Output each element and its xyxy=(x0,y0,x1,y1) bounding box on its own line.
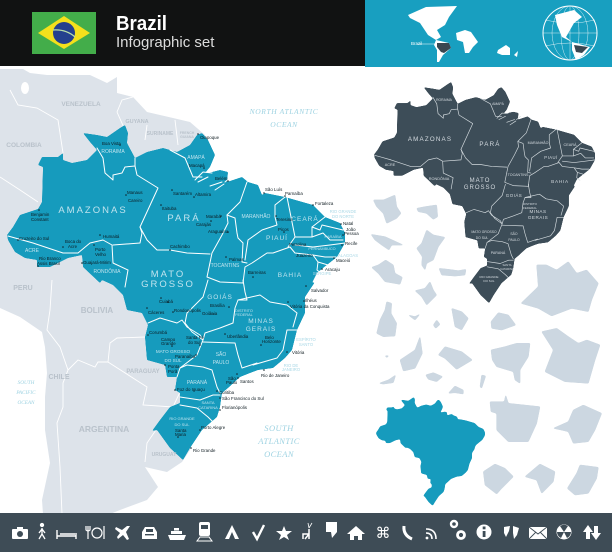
city labels: São xyxy=(228,376,236,381)
dark map state labels: GROSSO xyxy=(464,185,496,191)
city labels: Carajás xyxy=(196,222,212,227)
dark map state labels: MINAS xyxy=(529,209,547,214)
state labels: SÃO xyxy=(216,351,226,358)
city labels xyxy=(19,135,359,453)
dark map state labels: TOCANTINS xyxy=(508,173,529,177)
state labels: DO SUL xyxy=(175,422,190,427)
icon: check xyxy=(253,525,264,539)
city labels: Belém xyxy=(215,176,228,181)
city labels: Belo xyxy=(265,335,274,340)
city labels: Juazeiro xyxy=(296,253,313,258)
dark map state labels: BAHIA xyxy=(551,179,569,184)
dark map state labels: DO SUL xyxy=(476,236,488,240)
country labels: ARGENTINA xyxy=(79,424,129,434)
city labels: Grande xyxy=(161,341,176,346)
dark map state labels: MATO GROSSO xyxy=(471,230,497,234)
icon: deer xyxy=(303,523,312,539)
header globe panel xyxy=(365,0,612,67)
coastal state labels: SANTO xyxy=(299,342,314,347)
individual state silhouettes xyxy=(371,195,600,388)
ocean labels: PACIFIC xyxy=(15,390,36,396)
city labels: Vitória xyxy=(292,350,305,355)
country labels: GUIANA xyxy=(180,135,194,139)
city labels: Teresina xyxy=(276,217,293,222)
state labels: PARÁ xyxy=(167,213,201,224)
icon: tent xyxy=(225,525,239,539)
city labels: Paulo xyxy=(226,380,238,385)
city labels: Picos xyxy=(278,227,290,232)
globe locator xyxy=(543,6,597,60)
city labels: Boa Vista xyxy=(102,141,121,146)
icon: knife fork plate xyxy=(86,526,104,539)
city labels: Cuiabá xyxy=(159,299,173,304)
icon: walker xyxy=(39,524,45,539)
world locator map xyxy=(408,6,518,62)
coastal state labels: ESPÍRITO xyxy=(296,337,316,342)
dark map state labels: GERAIS xyxy=(528,215,548,220)
city labels: Rio Branco xyxy=(39,256,61,261)
dark map state labels: AMAPÁ xyxy=(492,102,505,106)
icon: car xyxy=(142,527,157,539)
state labels: PARANÁ xyxy=(187,379,208,386)
city labels: Careiro xyxy=(128,198,143,203)
state labels: TOCANTINS xyxy=(211,263,240,269)
city labels: Cáceres xyxy=(148,310,165,315)
icon: train xyxy=(197,522,212,541)
state labels: GERAIS xyxy=(246,326,276,333)
city labels: Araguaína xyxy=(208,229,229,234)
dark map state labels: PAULO xyxy=(508,238,520,242)
state labels: DISTRITO xyxy=(235,309,253,313)
main map xyxy=(0,69,359,514)
icon: ship xyxy=(168,528,186,540)
icon: bed xyxy=(57,530,76,539)
country labels: GUYANA xyxy=(125,119,149,125)
dark map state labels: FEDERAL xyxy=(523,206,537,210)
city labels: Porã xyxy=(168,369,178,374)
land: neighbouring countries xyxy=(0,69,210,514)
map of states: dark Brazil xyxy=(374,82,595,303)
state labels: PARAÍBA xyxy=(324,234,342,239)
city labels: Parnaíba xyxy=(285,191,303,196)
teal Brazil silhouette xyxy=(376,397,485,506)
state labels: GOIÁS xyxy=(207,292,233,301)
city labels: Santa xyxy=(175,428,187,433)
dark map state labels: CATARINA xyxy=(500,267,514,271)
city labels: Boca do xyxy=(65,239,82,244)
city labels: Petrolina xyxy=(289,242,307,247)
city labels: Curitiba xyxy=(219,390,235,395)
coastal state labels: ALAGOAS xyxy=(338,253,358,258)
city labels: Oiapoque xyxy=(200,135,220,140)
city labels: Horizonte xyxy=(262,339,281,344)
city labels: Ilhéus xyxy=(305,298,318,303)
dark map state labels: MARANHÃO xyxy=(528,140,549,145)
ocean labels: NORTH ATLANTIC xyxy=(249,107,319,116)
state labels: DO SUL xyxy=(164,358,182,363)
dark map state labels xyxy=(385,98,577,283)
city labels: Campo xyxy=(161,337,176,342)
city labels: Aracaju xyxy=(325,267,340,272)
dark map state labels: RONDÔNIA xyxy=(429,176,450,181)
city labels: São Luís xyxy=(265,187,283,192)
icon: info xyxy=(476,524,492,540)
city labels: Pessoa xyxy=(344,231,359,236)
state labels: GROSSO xyxy=(141,279,195,290)
city labels: Salvador xyxy=(311,288,329,293)
city labels: Rondonópolis xyxy=(174,308,202,313)
state labels: MARANHÃO xyxy=(242,213,271,220)
country labels: URUGUAY xyxy=(152,452,177,458)
city labels: Brasília xyxy=(210,303,225,308)
subtitle: Infographic set xyxy=(116,34,215,51)
city labels: Maria xyxy=(175,432,187,437)
state labels: AMAPÁ xyxy=(187,154,205,161)
city labels: Cruzeiro do Sul xyxy=(19,236,49,241)
city labels: Cachimbo xyxy=(170,244,190,249)
dark map state labels: DISTRITO xyxy=(523,202,538,206)
icon: command key: ⌘ xyxy=(376,524,390,542)
country labels: VENEZUELA xyxy=(61,101,101,108)
city labels: São Francisco do Sul xyxy=(222,396,264,401)
ocean labels: SOUTH xyxy=(264,423,294,433)
icon: mail xyxy=(529,527,547,539)
dark map state labels: PIAUÍ xyxy=(544,155,558,160)
city labels: Vitória da Conquista xyxy=(290,304,330,309)
city labels: Fortaleza xyxy=(315,201,334,206)
state labels: BAHIA xyxy=(278,272,302,279)
city labels: Paranaíba xyxy=(175,354,196,359)
coastal state labels: RIO DE xyxy=(284,363,298,368)
icon: plane xyxy=(115,526,130,540)
state labels: ACRE xyxy=(25,248,40,254)
icon: rss xyxy=(426,529,436,539)
city labels: Goiânia xyxy=(202,311,218,316)
state labels: SANTA xyxy=(201,400,215,405)
icon: camera xyxy=(12,527,28,539)
dark map state labels: RIO GRANDE xyxy=(479,275,499,279)
dark map state labels: SÃO xyxy=(510,231,518,236)
ocean labels: OCEAN xyxy=(264,449,295,459)
country labels: COLOMBIA xyxy=(6,142,42,149)
city labels: do Sul xyxy=(188,340,200,345)
city labels: Porto xyxy=(95,247,106,252)
country labels xyxy=(6,101,195,458)
city labels: Porto Alegre xyxy=(201,425,226,430)
state labels: MATO GROSSO xyxy=(156,349,191,354)
country labels: PERU xyxy=(13,285,33,292)
dark map state labels: SANTA xyxy=(502,263,512,267)
dark map state labels: PARANÁ xyxy=(491,251,506,255)
coastal state labels: RIO GRANDE xyxy=(330,209,356,214)
dark map state labels: AMAZONAS xyxy=(408,136,452,143)
state labels: PAULO xyxy=(213,360,229,366)
city labels: Maceió xyxy=(336,258,351,263)
city labels: Ponta xyxy=(168,364,180,369)
coastal state labels xyxy=(282,209,358,372)
dark map state labels: GOIÁS xyxy=(506,193,522,198)
icon: radiation xyxy=(556,524,572,540)
city labels: Rio Grande xyxy=(193,448,216,453)
country labels: FRENCH xyxy=(180,131,195,135)
city labels: Macapá xyxy=(189,163,205,168)
dark map state labels: PARÁ xyxy=(479,141,501,148)
state labels: PERNAMBUCO xyxy=(308,247,336,251)
city labels: Constant xyxy=(31,217,49,222)
state labels: MATO xyxy=(151,269,185,280)
city labels: Benjamin xyxy=(31,212,50,217)
state labels: RORAIMA xyxy=(101,149,125,155)
city markers xyxy=(18,134,343,448)
icon: gears xyxy=(451,521,464,538)
city labels: Guajará-Mirim xyxy=(83,260,111,265)
city labels: Palmas xyxy=(229,257,244,262)
dark map state labels: MATO xyxy=(470,178,490,184)
ocean labels xyxy=(15,107,319,459)
city labels: Natal xyxy=(343,221,353,226)
dark map state labels: RORAIMA xyxy=(436,98,453,102)
dark map state labels: CEARÁ xyxy=(563,143,577,147)
state labels: AMAZONAS xyxy=(58,205,128,216)
dark map state labels: DO SUL xyxy=(483,279,495,283)
city labels: Santarém xyxy=(173,191,192,196)
country labels: SURINAME xyxy=(147,131,174,137)
state labels: CATARINA xyxy=(198,405,218,410)
city labels: Florianópolis xyxy=(222,405,248,410)
state labels xyxy=(25,149,342,427)
city labels: Assis Brasil xyxy=(37,261,60,266)
coastal state labels: JANEIRO xyxy=(282,367,301,372)
state labels: PIAUÍ xyxy=(266,233,288,242)
icon: phone xyxy=(404,526,412,539)
city labels: Acre xyxy=(68,244,78,249)
country labels: PARAGUAY xyxy=(126,369,160,375)
dark map state labels: ACRE xyxy=(385,163,396,167)
icon: up and down arrows xyxy=(583,525,601,540)
icon: pin xyxy=(326,522,337,538)
coastal state labels: DO NORTE xyxy=(332,214,354,219)
ocean labels: OCEAN xyxy=(270,120,298,129)
city labels: Velho xyxy=(95,252,107,257)
city labels: João xyxy=(346,227,356,232)
city labels: Itaituba xyxy=(162,206,177,211)
city labels: Santa Fé xyxy=(186,335,204,340)
state labels: MINAS xyxy=(248,318,274,325)
icon: star xyxy=(276,526,292,540)
ocean labels: SOUTH xyxy=(18,380,35,386)
Brazil states xyxy=(7,125,345,460)
city labels: Humaitá xyxy=(103,234,120,239)
ocean labels: OCEAN xyxy=(17,400,35,406)
country labels: CHILE xyxy=(48,374,70,381)
header bar xyxy=(0,0,365,66)
icon bar xyxy=(0,513,612,552)
lower state silhouettes xyxy=(448,386,602,495)
icon: globe xyxy=(504,526,519,539)
world locator map: Brazil xyxy=(411,41,422,46)
city labels: Altamira xyxy=(195,192,212,197)
city labels: Uberlândia xyxy=(227,334,249,339)
city labels: Foz do Iguaçu xyxy=(177,387,205,392)
state labels: FEDERAL xyxy=(235,313,253,317)
icon: house xyxy=(347,526,365,540)
title: Brazil xyxy=(116,13,167,35)
city labels: Barreiras xyxy=(248,270,267,275)
city labels: Corumbá xyxy=(149,330,168,335)
coastal state labels: SERGIPE xyxy=(313,271,332,276)
city labels: Recife xyxy=(345,241,358,246)
state labels: RONDÔNIA xyxy=(94,268,121,275)
state labels: CEARÁ xyxy=(291,214,319,223)
city labels: Manaus xyxy=(127,190,143,195)
icon: Brazil flag xyxy=(32,12,96,54)
ocean labels: ATLANTIC xyxy=(257,436,300,446)
country borders xyxy=(0,90,180,514)
state labels: RIO GRANDE xyxy=(169,416,195,421)
city labels: Marabá xyxy=(206,214,221,219)
city labels: Rio de Janeiro xyxy=(261,373,290,378)
city labels: Santos xyxy=(240,379,254,384)
country labels: BOLIVIA xyxy=(81,306,113,315)
